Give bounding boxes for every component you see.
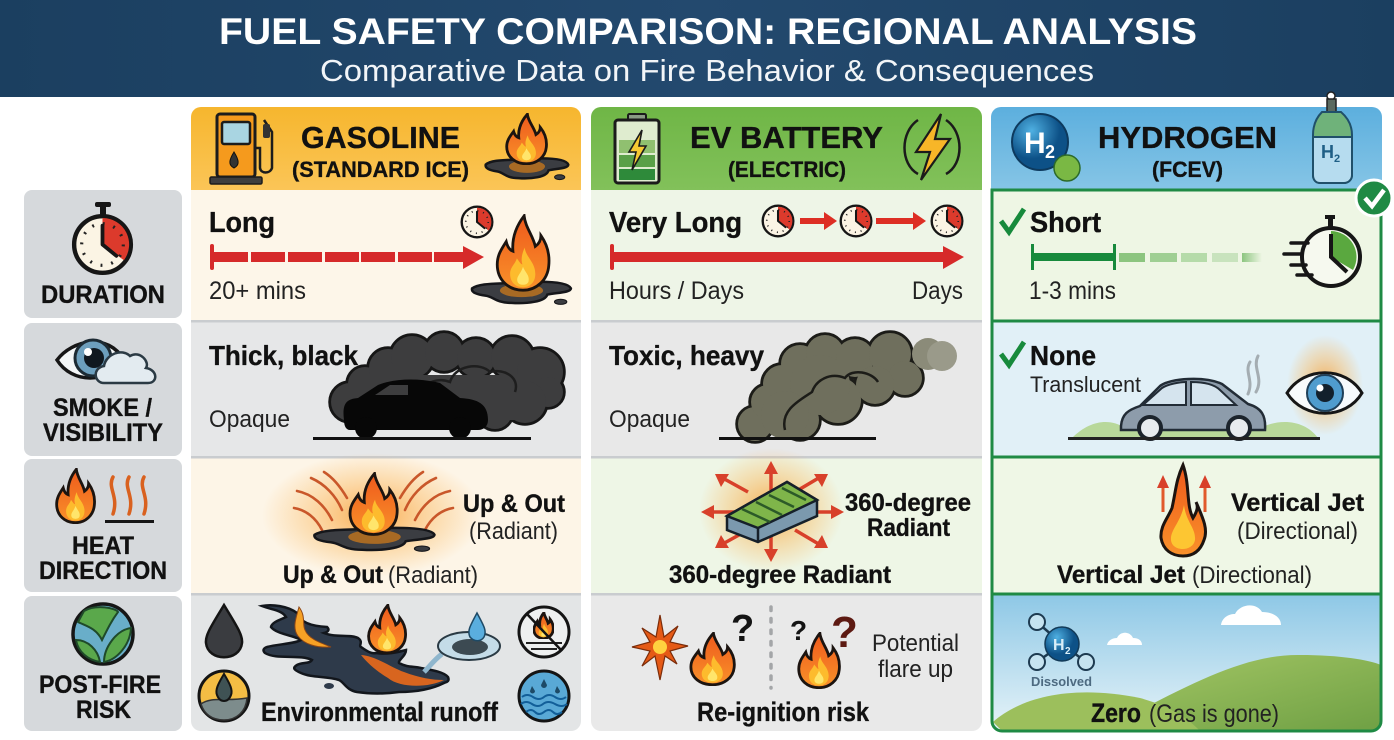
row: post-fire: Re-ignition risk [697,697,870,727]
icon: storm drain [424,613,500,672]
icon: burning puddle [486,114,568,180]
row: duration: Long [209,207,275,239]
row: smoke [191,320,581,456]
icon: hydrogen tank: H [1321,142,1334,162]
row: smoke [591,320,982,456]
icon: burning puddle [472,216,571,304]
icon: hydrogen tank [1313,92,1352,183]
icon: battery [615,114,659,183]
icon: spark [632,615,688,680]
caption [283,561,478,589]
row label: post-fire risk: POST-FIRE [39,671,161,699]
icon: hydrogen tank: 2 [1334,153,1340,165]
label: vertical jet: Vertical Jet [1231,489,1365,517]
row: duration: Short [1030,207,1101,239]
title banner [0,0,1394,97]
icon: eye with faint flame [1287,335,1363,435]
icon: H2 molecule ball [1012,114,1080,181]
label: 360-degree radiant: Radiant [867,514,951,542]
row label: post-fire risk: RISK [76,696,131,724]
timeline: short bar [1031,244,1262,270]
row: smoke: Opaque [609,406,690,433]
title: FUEL SAFETY COMPARISON: REGIONAL ANALYSIS [219,11,1197,52]
label: 360-degree radiant [845,489,971,542]
icon: dissolved H2 molecule [1029,614,1094,689]
row: post-fire [191,593,581,731]
row: smoke: Opaque [209,406,290,433]
illustration: radiant puddle fire [262,453,482,577]
icon: water [519,671,569,721]
caption: (Directional) [1192,562,1312,589]
icon: dissolved H2 molecule: Dissolved [1031,674,1092,689]
caption: (Radiant) [388,562,478,589]
label: potential flare up [872,630,959,683]
row: heat [591,448,982,593]
icon: H2 molecule ball: H [1024,127,1046,160]
label: vertical jet [1231,489,1365,545]
illustration: vertical jet flame [1157,465,1211,556]
row: duration: Days [912,277,963,305]
arrow: long timeline [210,244,484,270]
badge: recommended check [1356,180,1392,216]
icon: flame [57,469,95,523]
icon: H2 molecule ball: 2 [1045,142,1055,162]
icon: dissolved H2 molecule: 2 [1065,646,1071,657]
row: duration [191,190,581,320]
row: smoke: Thick, black [209,340,358,371]
column header: EV battery: EV BATTERY [690,120,883,155]
row: heat: 360-degree Radiant [669,561,892,589]
label: vertical jet: (Directional) [1237,518,1358,545]
row label: duration [24,190,182,318]
row labels panel [24,190,182,731]
row label: smoke and visibility: VISIBILITY [43,419,163,447]
row: duration: Very Long [609,207,742,239]
icon: no fire [519,607,569,657]
row: smoke [992,322,1381,456]
row label: heat direction: DIRECTION [39,557,167,585]
illustration: battery radiating in all directions [699,448,844,572]
label: potential flare up: flare up [878,656,953,683]
illustration: car with clear air [1068,379,1320,440]
icon: question mark: ? [831,608,858,657]
column: EV battery [591,107,982,731]
icon: steam [1248,356,1259,394]
row: smoke: Translucent [1030,372,1141,397]
row: duration [992,190,1381,320]
row: post-fire [591,593,982,731]
hydrogen highlight frame [992,190,1381,731]
icon: check [1001,342,1024,365]
row: heat [191,453,581,593]
column header: hydrogen: HYDROGEN [1098,120,1277,155]
row label: heat direction [24,459,182,592]
column header: hydrogen: (FCEV) [1152,157,1223,182]
row: duration: Hours / Days [609,277,744,305]
icon: question mark: ? [731,608,754,650]
row: smoke: Toxic, heavy [609,340,764,371]
column header: EV battery [591,107,982,190]
icon: dissolved H2 molecule: H [1053,637,1065,654]
icon: fast stopwatch [1284,215,1360,286]
icon: cloud [1221,605,1281,625]
icon: fuel pump [210,114,272,184]
column: hydrogen [991,92,1392,731]
icon: heat waves [105,477,154,523]
illustration: burning fuel spill [262,605,449,694]
row: post-fire [992,595,1381,731]
icon: lightning bolt [904,114,960,180]
icon: flame [799,633,839,688]
row label: smoke and visibility: SMOKE / [53,394,152,422]
icon: oil drop [206,605,242,657]
column header: EV battery: (ELECTRIC) [728,157,846,182]
subtitle: Comparative Data on Fire Behavior & Consequences [320,53,1094,88]
caption [1057,561,1312,589]
label: potential flare up: Potential [872,630,959,657]
row: duration: 20+ mins [209,277,306,305]
column: gasoline [191,107,581,731]
icon: flame [691,633,734,685]
icon: check [1001,209,1024,232]
illustration: car in black smoke [313,332,564,440]
icon: question mark: ? [790,615,807,646]
divider [769,607,773,688]
column header: gasoline: (STANDARD ICE) [292,157,469,182]
icon: globe [73,604,133,664]
icon: cloud [1107,633,1142,645]
caption: Zero [1091,698,1141,728]
column header: gasoline: GASOLINE [301,120,460,155]
icon: oil on water [199,671,249,721]
icon: eye and cloud [57,340,155,383]
illustration: toxic smoke plume [719,332,957,442]
label: up and out: (Radiant) [469,518,558,545]
icon: small clock [462,207,492,237]
icon: stopwatch [74,202,131,273]
row: smoke: None [1030,340,1096,371]
caption [1091,698,1279,728]
column header: gasoline [191,107,581,190]
row label: heat direction: HEAT [72,532,134,560]
column header: hydrogen [991,92,1382,190]
icons: clocks and arrows [763,206,962,236]
row: duration: 1-3 mins [1029,277,1116,305]
row label: smoke and visibility [24,323,182,456]
caption: Vertical Jet [1057,561,1186,589]
row: heat [992,458,1381,593]
row label: post-fire risk [24,596,182,731]
arrow: very long timeline [610,244,964,270]
illustration: hills [993,655,1381,731]
label: up and out [463,490,566,545]
caption: (Gas is gone) [1149,700,1279,728]
row: duration [591,190,982,320]
row label: duration: DURATION [41,281,165,309]
caption: Up & Out [283,561,384,589]
label: up and out: Up & Out [463,490,566,518]
label: 360-degree radiant: 360-degree [845,489,971,517]
row: post-fire: Environmental runoff [261,697,499,727]
